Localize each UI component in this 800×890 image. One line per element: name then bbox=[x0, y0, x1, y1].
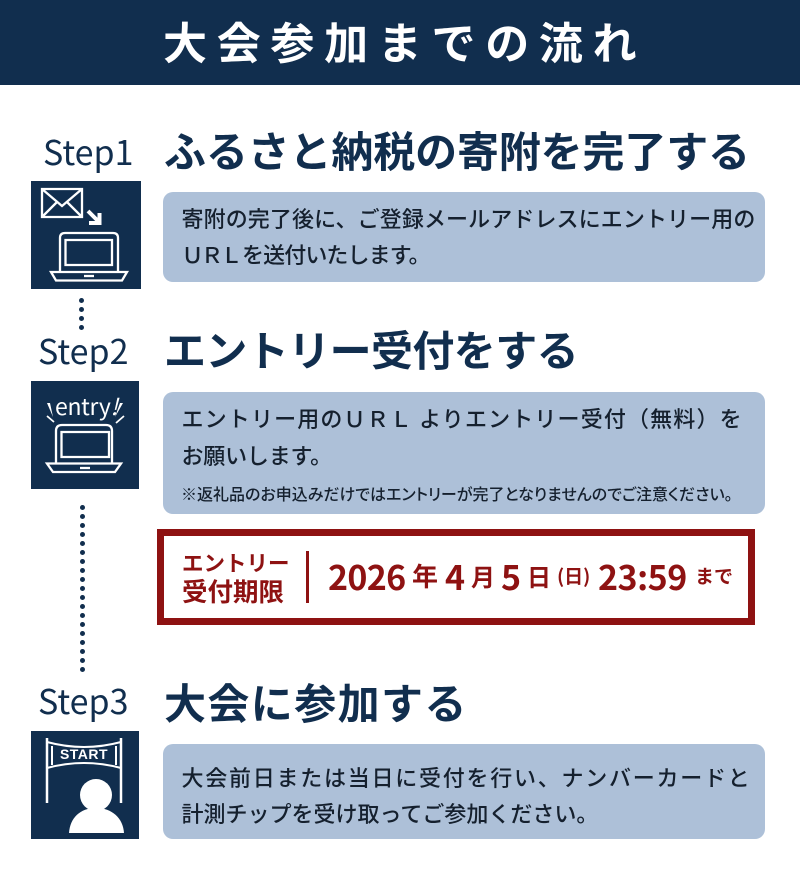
step 3 label: Step3 bbox=[38, 675, 128, 724]
step 1 description panel bbox=[163, 192, 765, 282]
deadline date: 月 bbox=[471, 558, 495, 593]
step 3 description panel bbox=[163, 744, 765, 839]
deadline date: 2026 bbox=[328, 551, 405, 600]
icon: entry laptop bbox=[31, 381, 139, 489]
connector dots 2 bbox=[80, 505, 85, 672]
deadline date: 23:59 bbox=[598, 551, 687, 600]
deadline divider bbox=[306, 551, 309, 603]
step 2 description panel bbox=[163, 392, 765, 514]
step 2 text line 1: エントリー用のＵＲＬ よりエントリー受付（無料）を bbox=[182, 402, 743, 434]
step 2 label: Step2 bbox=[38, 325, 128, 374]
icon: start gate and runner bbox=[31, 731, 139, 839]
deadline date: 5 bbox=[501, 551, 521, 600]
step 3 heading: 大会に参加する bbox=[164, 671, 468, 732]
step 1 label: Step1 bbox=[43, 126, 133, 175]
connector dots 1 bbox=[79, 298, 84, 330]
step 1 heading: ふるさと納税の寄附を完了する bbox=[164, 119, 750, 180]
step 2 note: ※返礼品のお申込みだけではエントリーが完了となりませんのでご注意ください。 bbox=[181, 481, 733, 505]
deadline date bbox=[328, 551, 733, 600]
step 1 text line 1: 寄附の完了後に、ご登録メールアドレスにエントリー用の bbox=[182, 202, 755, 234]
header banner bbox=[0, 0, 800, 85]
step 3 text line 2: 計測チップを受け取ってご参加ください。 bbox=[182, 797, 598, 829]
icon: email to laptop bbox=[31, 181, 141, 289]
step 2 text line 2: お願いします。 bbox=[182, 439, 332, 471]
step 3 text line 1: 大会前日または当日に受付を行い、ナンバーカードと bbox=[182, 761, 752, 793]
step 1 text line 2: ＵＲＬを送付いたします。 bbox=[182, 238, 430, 270]
icon: start gate and runner: START bbox=[60, 746, 108, 762]
deadline date: (日) bbox=[557, 562, 590, 589]
deadline date: 日 bbox=[527, 558, 551, 593]
title: 大会参加までの流れ bbox=[163, 8, 646, 72]
deadline date: まで bbox=[695, 562, 733, 589]
deadline box bbox=[157, 529, 755, 625]
icon: entry laptop: entry! bbox=[55, 388, 121, 422]
step 2 heading: エントリー受付をする bbox=[164, 318, 578, 379]
deadline label line 1: エントリー bbox=[182, 547, 290, 578]
deadline date: 4 bbox=[445, 551, 465, 600]
deadline date: 年 bbox=[412, 557, 438, 594]
deadline label line 2: 受付期限 bbox=[182, 572, 284, 609]
